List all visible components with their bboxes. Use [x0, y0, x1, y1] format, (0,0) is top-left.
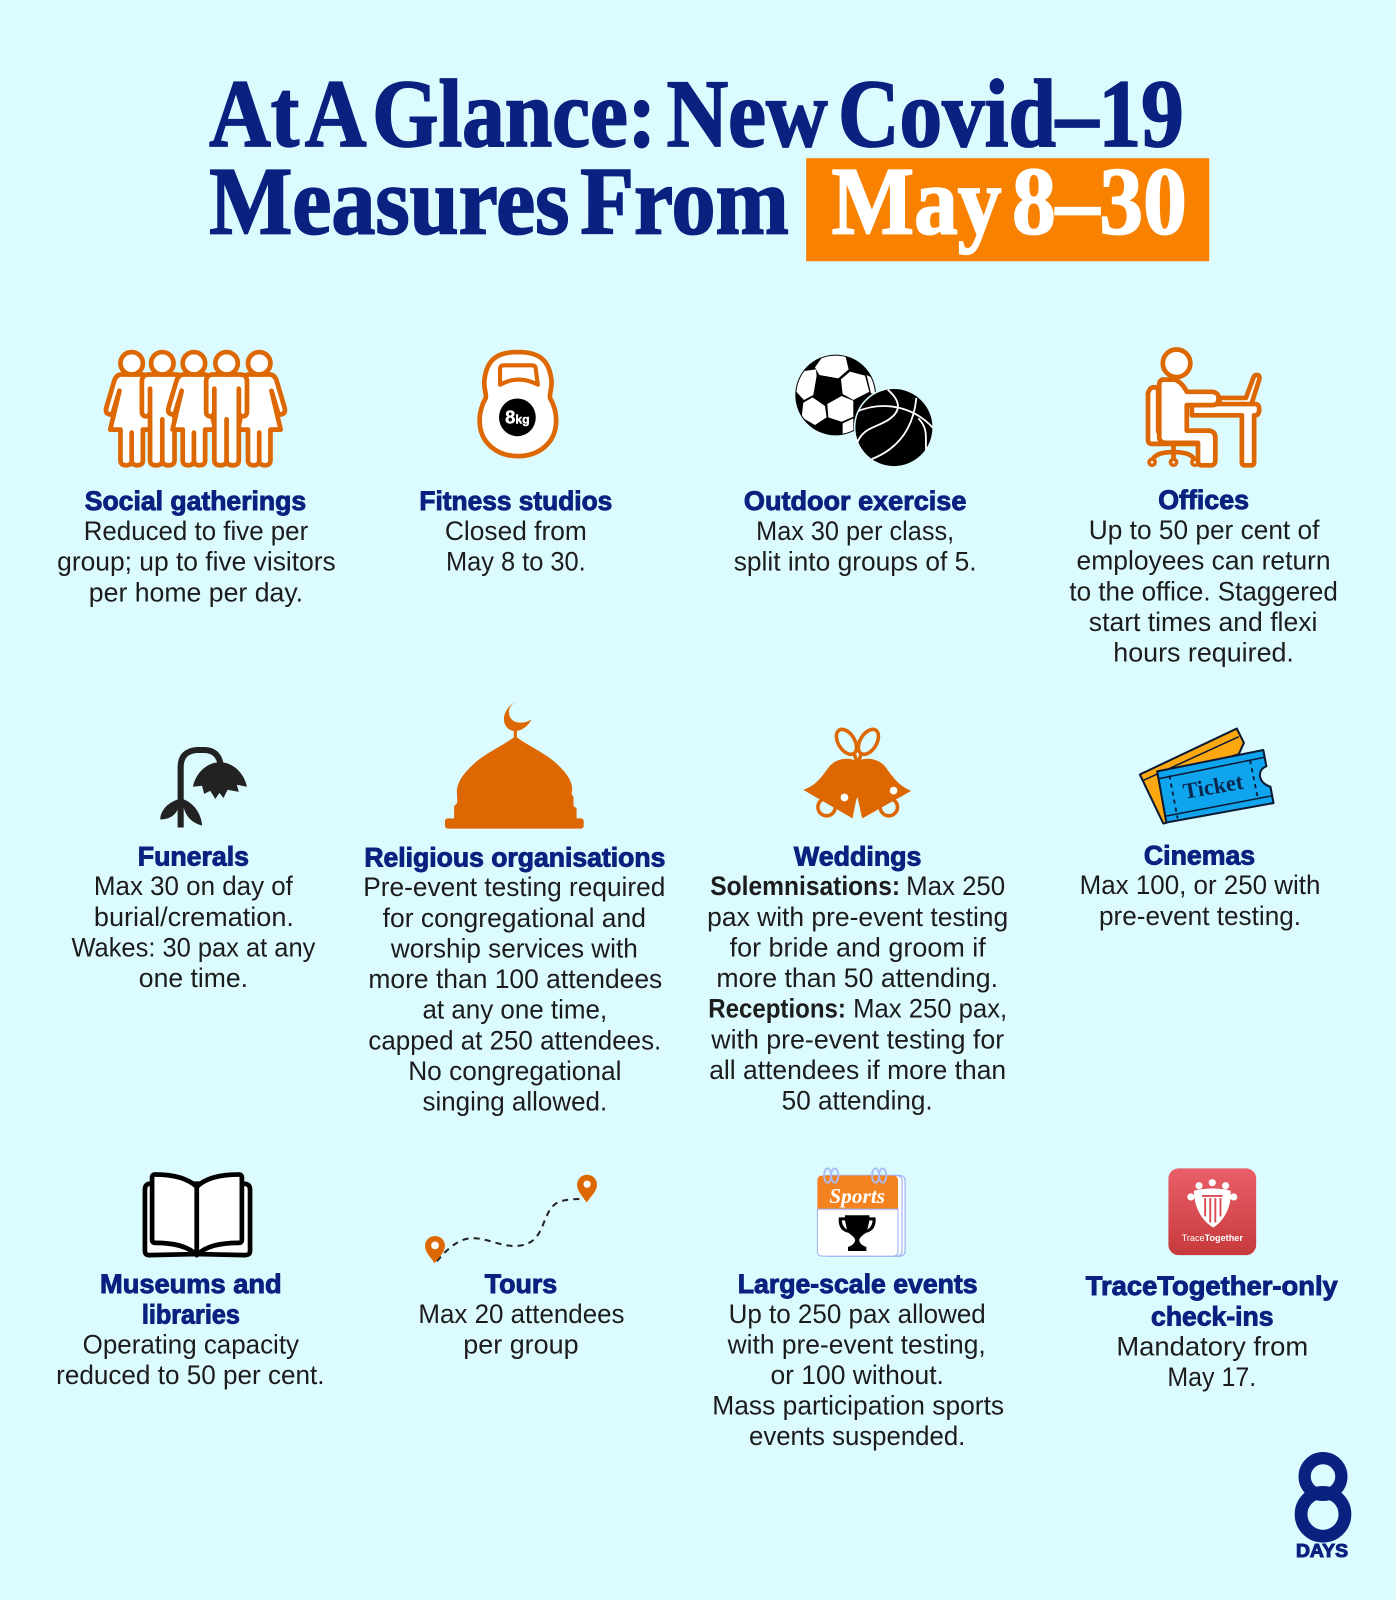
panel: large-scale events — [712, 1168, 1004, 1451]
text: weddings: Max 250 pax, — [853, 994, 1007, 1024]
text: tours — [418, 1299, 625, 1359]
text: tracetogether-only check-ins: May 17. — [1167, 1362, 1256, 1392]
panel: religious organisations — [363, 702, 665, 1117]
text: weddings: all attendees if more than — [709, 1055, 1006, 1085]
text: religious organisations: singing allowed. — [422, 1087, 607, 1117]
icon: route with map pins — [425, 1175, 597, 1263]
heading: funerals: Funerals — [138, 841, 249, 871]
text: religious organisations — [363, 872, 665, 1117]
text: cinemas: pre-event testing. — [1099, 901, 1301, 931]
panel: fitness studios — [419, 352, 612, 577]
heading: social gatherings: Social gatherings — [85, 486, 306, 516]
text: tracetogether-only check-ins: Mandatory from — [1116, 1331, 1308, 1361]
text: fitness studios: May 8 to 30. — [446, 547, 586, 577]
heading: offices: Offices — [1158, 485, 1249, 515]
panel: tours — [418, 1175, 625, 1359]
text: funerals — [71, 871, 316, 993]
icon: wilted flower — [160, 750, 247, 828]
text: weddings: Max 250 — [906, 871, 1005, 901]
panel: offices — [1069, 349, 1338, 668]
text: religious organisations: Pre-event testing required — [363, 872, 665, 902]
heading: tours: Tours — [485, 1269, 557, 1299]
panel: cinemas — [1080, 729, 1320, 931]
text: outdoor exercise: split into groups of 5. — [734, 547, 977, 577]
text: museums and libraries — [56, 1329, 325, 1390]
text: social gatherings — [57, 516, 336, 607]
text: weddings: Receptions: — [708, 994, 846, 1024]
heading: tracetogether-only check-ins: TraceTogether-only — [1086, 1271, 1338, 1301]
text: tours: Max 20 attendees — [418, 1299, 625, 1329]
text: offices: to the office. Staggered — [1069, 576, 1338, 606]
text: large-scale events: Up to 250 pax allowed — [729, 1299, 986, 1329]
icon: tickets: Ticket — [1181, 769, 1246, 804]
icon: soccer ball and basketball — [793, 353, 934, 467]
text: social gatherings: group; up to five visitors — [57, 547, 336, 577]
title: At A Glance: New Covid–19 — [209, 61, 1184, 167]
text: tours: per group — [463, 1329, 579, 1359]
heading: museums and libraries — [100, 1269, 282, 1329]
icon: tracetogether app: TraceTogether — [1182, 1233, 1243, 1243]
text: funerals: burial/cremation. — [94, 902, 294, 932]
text: large-scale events: with pre-event testing, — [727, 1329, 986, 1359]
panel: funerals — [71, 750, 316, 993]
title: Measures From — [209, 149, 789, 255]
logo: 8 Days: DAYS — [1296, 1540, 1348, 1561]
heading: museums and libraries: libraries — [142, 1299, 240, 1329]
text: museums and libraries: reduced to 50 per cent. — [56, 1360, 325, 1390]
text: funerals: Wakes: 30 pax at any — [71, 932, 316, 962]
text: fitness studios — [445, 516, 587, 577]
icon: tickets — [1140, 729, 1274, 823]
text: cinemas: Max 100, or 250 with — [1080, 870, 1320, 900]
heading: museums and libraries: Museums and — [100, 1269, 282, 1299]
heading: outdoor exercise: Outdoor exercise — [744, 486, 966, 516]
text: funerals: Max 30 on day of — [94, 871, 293, 901]
text: weddings: more than 50 attending. — [716, 963, 998, 993]
text: large-scale events: Mass participation sports — [712, 1391, 1004, 1421]
title — [209, 61, 1209, 261]
icon: kettlebell: 8kg — [505, 406, 530, 427]
heading: religious organisations: Religious organisations — [364, 842, 665, 872]
text: offices: Up to 50 per cent of — [1089, 515, 1320, 545]
text: weddings: for bride and groom if — [730, 932, 986, 962]
icon: mosque dome — [445, 702, 584, 829]
text: religious organisations: worship services with — [390, 933, 638, 963]
text: tracetogether-only check-ins — [1116, 1331, 1308, 1392]
heading: cinemas: Cinemas — [1144, 840, 1255, 870]
icon: person at desk — [1148, 349, 1259, 465]
text: religious organisations: No congregational — [408, 1056, 621, 1086]
icon: wedding bells — [803, 726, 911, 818]
heading: tracetogether-only check-ins: check-ins — [1151, 1302, 1274, 1332]
text: cinemas — [1080, 870, 1320, 931]
panel: museums and libraries — [56, 1174, 325, 1390]
date highlight box: May 8–30 — [832, 149, 1187, 255]
logo: 8 Days — [1296, 1458, 1348, 1561]
text: outdoor exercise — [734, 516, 977, 577]
icon: tracetogether app — [1168, 1168, 1256, 1255]
icon: five people — [106, 352, 285, 465]
icon: sports calendar with trophy: Sports — [829, 1184, 885, 1208]
panel: social gatherings — [57, 352, 336, 607]
text: weddings: with pre-event testing for — [710, 1024, 1004, 1054]
text: large-scale events: or 100 without. — [770, 1360, 944, 1390]
text: religious organisations: for congregational and — [383, 903, 646, 933]
icon: sports calendar with trophy — [817, 1168, 905, 1256]
heading: large-scale events: Large-scale events — [738, 1269, 978, 1299]
panel: outdoor exercise — [734, 353, 977, 577]
text: religious organisations: capped at 250 attendees. — [368, 1025, 661, 1055]
text: offices — [1069, 515, 1338, 668]
text: offices: start times and flexi — [1089, 607, 1317, 637]
icon: kettlebell — [480, 352, 556, 456]
text: weddings: 50 attending. — [782, 1085, 933, 1115]
text: funerals: one time. — [139, 963, 248, 993]
text: offices: hours required. — [1113, 638, 1294, 668]
text: social gatherings: Reduced to five per — [84, 516, 308, 546]
panel: tracetogether-only check-ins — [1086, 1168, 1338, 1392]
text: weddings — [707, 871, 1008, 1115]
text: weddings: pax with pre-event testing — [707, 902, 1008, 932]
panel: weddings — [707, 726, 1008, 1115]
icon: open book — [145, 1174, 250, 1255]
text: museums and libraries: Operating capacity — [83, 1329, 299, 1359]
text: large-scale events — [712, 1299, 1004, 1451]
text: large-scale events: events suspended. — [749, 1421, 965, 1451]
heading: tracetogether-only check-ins — [1086, 1271, 1338, 1332]
text: fitness studios: Closed from — [445, 516, 587, 546]
heading: fitness studios: Fitness studios — [419, 486, 612, 516]
text: religious organisations: at any one time, — [422, 995, 607, 1025]
text: offices: employees can return — [1077, 546, 1331, 576]
text: social gatherings: per home per day. — [89, 577, 303, 607]
text: religious organisations: more than 100 attendees — [368, 964, 662, 994]
text: weddings: Solemnisations: — [710, 871, 900, 901]
text: outdoor exercise: Max 30 per class, — [756, 516, 954, 546]
heading: weddings: Weddings — [794, 841, 921, 871]
